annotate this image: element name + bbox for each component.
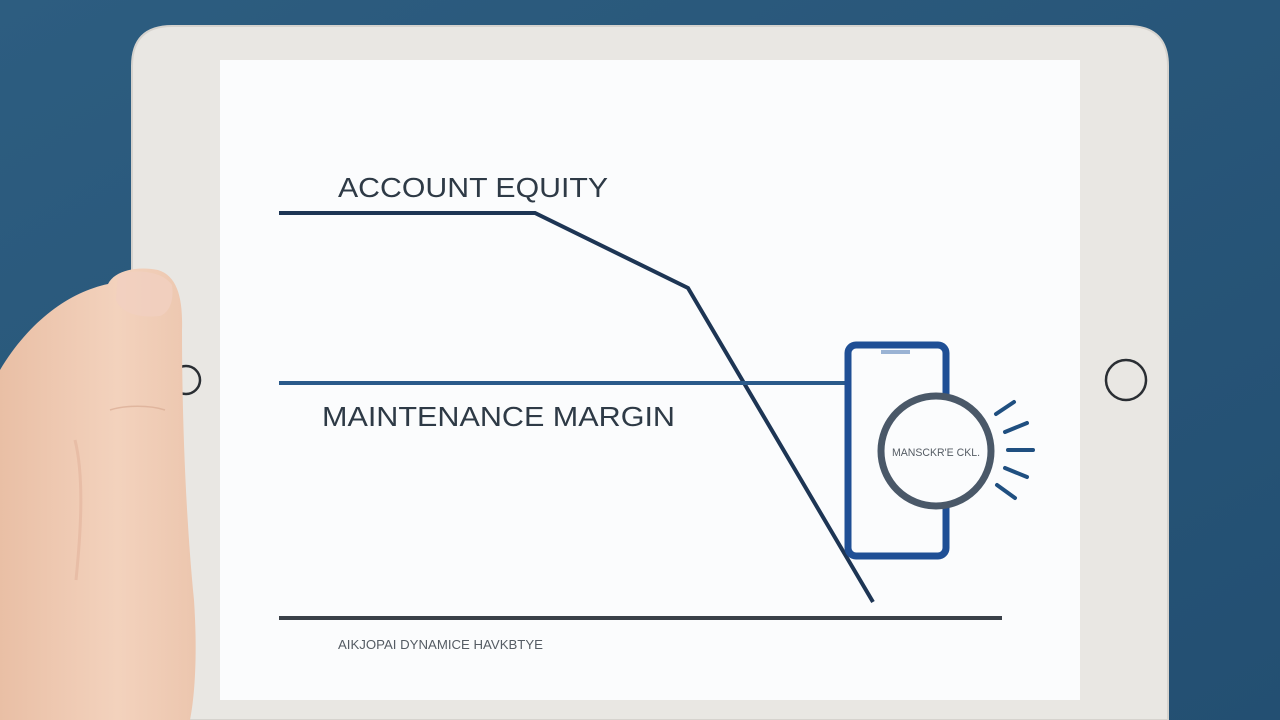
tablet bezel xyxy=(132,26,1168,720)
icon: phone alert: MANSCKR'E CKL. xyxy=(892,447,980,459)
caption: AIKJOPAI DYNAMICE HAVKBTYE xyxy=(338,637,543,652)
camera xyxy=(172,366,200,394)
hand xyxy=(0,269,196,720)
icon: phone alert xyxy=(848,345,1033,556)
heading: maintenance margin: MAINTENANCE MARGIN xyxy=(322,401,675,432)
axis line xyxy=(279,616,1002,620)
line: account equity xyxy=(279,213,873,602)
line: maintenance margin xyxy=(279,381,850,385)
heading: account equity: ACCOUNT EQUITY xyxy=(338,172,608,203)
screen xyxy=(220,60,1080,700)
home button xyxy=(1106,360,1146,400)
